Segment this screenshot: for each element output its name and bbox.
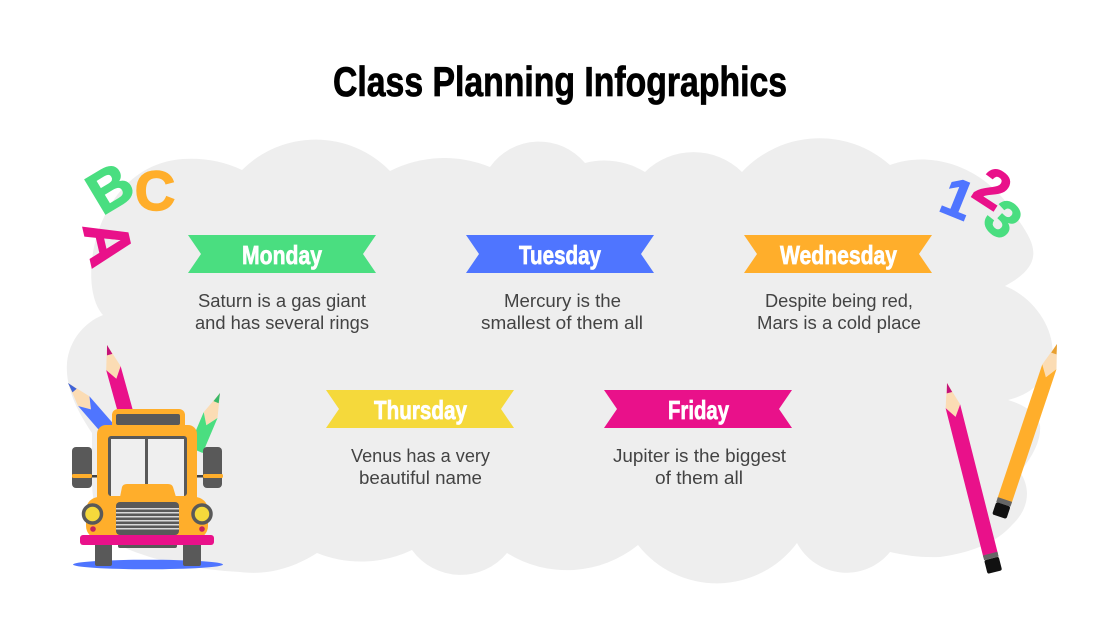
card: Wednesday: Wednesday [780, 240, 897, 270]
card: Thursday: Venus has a very [351, 446, 490, 466]
card: Tuesday [466, 235, 654, 333]
card: Wednesday [744, 235, 932, 333]
bumper [80, 535, 214, 545]
card: Thursday [326, 390, 514, 488]
title: Class Planning Infographics [333, 58, 787, 105]
card: Thursday: beautiful name [359, 468, 482, 488]
numbers 123: 1 [932, 165, 983, 232]
card: Monday [188, 235, 376, 333]
card: Thursday: Thursday [374, 395, 467, 425]
letters ABC: C [135, 159, 175, 222]
numbers 123: 2 [964, 155, 1021, 222]
card: Friday: Friday [668, 395, 729, 425]
card: Monday: Saturn is a gas giant [198, 291, 366, 311]
letters ABC: A [69, 214, 146, 273]
letters ABC [69, 150, 175, 273]
card: Friday: of them all [655, 468, 743, 488]
pencil: blue bus [62, 378, 114, 435]
background cloud [67, 138, 1053, 583]
numbers 123 [932, 155, 1033, 251]
letters ABC: B [76, 150, 145, 227]
numbers 123: 3 [972, 189, 1033, 251]
card: Tuesday: Mercury is the [504, 291, 621, 311]
headlights [84, 505, 211, 532]
card: Tuesday: smallest of them all [481, 313, 643, 333]
mirrors [72, 447, 223, 488]
wheels [95, 540, 201, 566]
card: Wednesday: Despite being red, [765, 291, 913, 311]
card: Monday: and has several rings [195, 313, 369, 333]
card: Tuesday: Tuesday [519, 240, 601, 270]
school bus with pencils [62, 343, 227, 569]
card: Friday [604, 390, 792, 488]
pencil: orange right [992, 342, 1064, 519]
bus body [86, 409, 208, 539]
pencil: green bus [189, 390, 227, 453]
pencil: pink bus [100, 343, 136, 424]
card: Monday: Monday [242, 240, 322, 270]
bus shadow [73, 560, 223, 569]
card: Wednesday: Mars is a cold place [757, 313, 921, 333]
card: Friday: Jupiter is the biggest [613, 446, 786, 466]
pencil: pink right [940, 381, 1002, 574]
grille [116, 502, 179, 535]
windshield [108, 436, 187, 505]
